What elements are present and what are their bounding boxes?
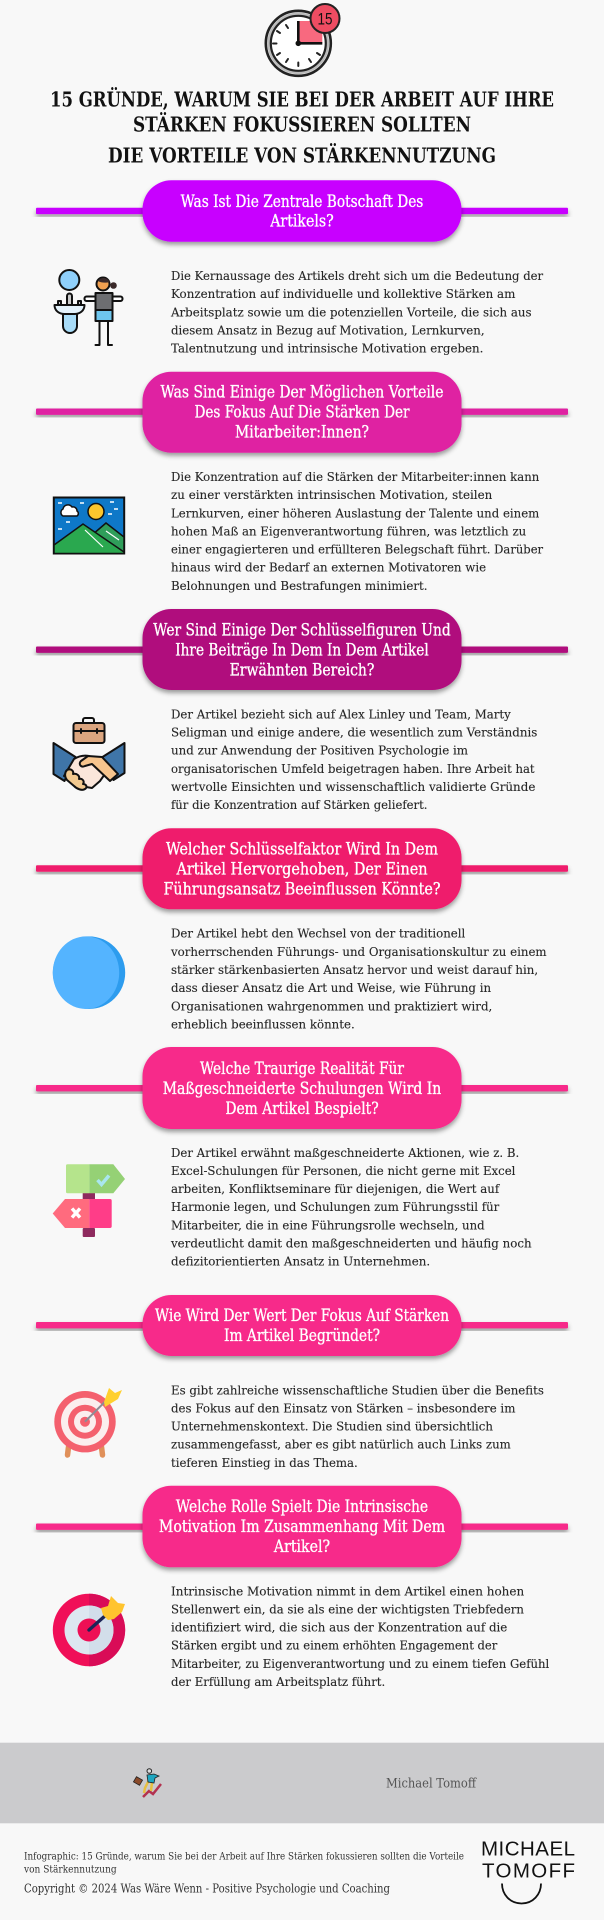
text: Aktionen: Mitarbeiter, die in eine Führungsrolle wechseln, und	[171, 1218, 485, 1232]
text: Konzentration auf Stärken: Belohnungen und Bestrafungen minimiert.	[171, 579, 428, 593]
icon: handshake and briefcase	[54, 718, 124, 790]
icon: sink and person	[54, 270, 122, 345]
heading: Schulungen	[36, 1047, 568, 1129]
panel: section 3	[36, 609, 568, 812]
text: Konzentration auf Stärken: Lernkurven, einer höheren Auslastung der Talente und einem	[171, 506, 540, 520]
text: Kernaussage: Die Kernaussage des Artikels dreht sich um die Bedeutung der	[171, 269, 543, 283]
panel: author band	[0, 1743, 604, 1823]
panel: section 7	[36, 1486, 568, 1689]
panel: section 2	[36, 372, 568, 593]
text: intrinsische Motivation: Stellenwert ein, da sie als eine der wichtigsten Triebfedern	[171, 1602, 524, 1616]
heading: Schlüsselfaktor: Artikel Hervorgehoben, Der Einen	[176, 860, 428, 878]
logo: Michael Tomoff: MICHAEL	[481, 1838, 575, 1860]
text: Aktionen: verdeutlicht damit den maßgeschneiderten und häufig noch	[170, 1236, 532, 1250]
text: Konzentration auf Stärken	[171, 470, 543, 593]
title: STÄRKEN FOKUSSIEREN SOLLTEN	[133, 112, 471, 136]
text: Studien: Es gibt zahlreiche wissenschaftliche Studien über die Benefits	[171, 1383, 544, 1397]
heading: Vorteile: Des Fokus Auf Die Stärken Der	[194, 402, 410, 422]
text: Aktionen: Harmonie legen, und Schulungen zum Führungsstil für	[171, 1200, 499, 1214]
text: Kernaussage: Arbeitsplatz sowie um die potenziellen Vorteile, die sich aus	[170, 305, 532, 319]
text: Studien	[171, 1383, 544, 1470]
text: Führungskultur: dass dieser Ansatz die Art und Weise, wie Führung in	[171, 981, 491, 995]
icon: blue circle	[53, 936, 125, 1009]
panel: section 4	[36, 828, 568, 1031]
text: Studien: tieferen Einstieg in das Thema.	[171, 1456, 358, 1470]
text: Kernaussage: Talentnutzung und intrinsische Motivation ergeben.	[171, 341, 483, 355]
footer credit	[23, 1850, 464, 1896]
text: Studien: des Fokus auf den Einsatz von Stärken – insbesondere im	[171, 1401, 516, 1415]
text: Schlüsselfiguren: Seligman und einige andere, die wesentlich zum Verständnis	[171, 726, 537, 740]
heading: Schlüsselfiguren: Erwähnten Bereich?	[230, 660, 375, 680]
heading: intrinsische Motivation: Artikel?	[273, 1537, 330, 1556]
heading: Schulungen: Maßgeschneiderte Schulungen Wird In	[163, 1079, 442, 1098]
icon: climbing businessman	[133, 1769, 161, 1797]
text: Schlüsselfiguren: und zur Anwendung der Positiven Psychologie im	[171, 744, 469, 758]
text: Schlüsselfiguren: Der Artikel bezieht sich auf Alex Linley und Team, Marty	[171, 707, 511, 721]
author name: Michael Tomoff	[386, 1776, 478, 1792]
icon: target with dart	[53, 1594, 125, 1666]
text: Führungskultur: Organisationen wahrgenommen und praktiziert wird,	[171, 999, 492, 1013]
text: intrinsische Motivation: Mitarbeiter, zu Eigenverantwortung und zu einem tiefen Gefühl	[171, 1657, 549, 1671]
footer credit: von Stärkennutzung	[23, 1864, 117, 1876]
heading: Schlüsselfiguren: Wer Sind Einige Der Schlüsselfiguren Und	[153, 620, 451, 640]
text: Aktionen	[170, 1146, 532, 1269]
text: Führungskultur: vorherrschenden Führungs- und Organisationskultur zu einem	[170, 945, 547, 959]
heading: Wert des Fokus: Im Artikel Begründet?	[224, 1326, 380, 1345]
panel: section 5	[36, 1047, 568, 1269]
text: Studien: zusammengefasst, aber es gibt natürlich auch Links zum	[171, 1438, 511, 1452]
heading: Vorteile	[36, 372, 568, 453]
text: Kernaussage	[170, 269, 543, 355]
heading: Schulungen: Welche Traurige Realität Für	[200, 1059, 404, 1078]
heading: Schlüsselfaktor	[36, 828, 568, 909]
heading: Wert des Fokus	[36, 1295, 568, 1356]
heading: zentrale Botschaft: Was Ist Die Zentrale Botschaft Des	[181, 192, 423, 211]
text: intrinsische Motivation: identifiziert wird, die sich aus der Konzentration auf die	[171, 1621, 507, 1635]
footer credit: Copyright © 2024 Was Wäre Wenn - Positive Psychologie und Coaching	[24, 1882, 390, 1896]
heading: Schlüsselfaktor: Führungsansatz Beeinflussen Könnte?	[164, 880, 441, 898]
logo: Michael Tomoff	[481, 1838, 575, 1904]
text: Führungskultur: stärker stärkenbasierten Ansatz hervor und weist darauf hin,	[171, 963, 538, 977]
text: intrinsische Motivation: Intrinsische Motivation nimmt in dem Artikel einen hohen	[171, 1584, 524, 1598]
text: Schlüsselfiguren: für die Konzentration auf Stärken geliefert.	[171, 798, 428, 812]
text: Führungskultur: erheblich beeinflussen könnte.	[171, 1017, 355, 1031]
heading: Vorteile: Was Sind Einige Der Möglichen Vorteile	[160, 382, 444, 402]
icon: clock with 15 badge	[266, 4, 340, 76]
text: Führungskultur: Der Artikel hebt den Wechsel von der traditionell	[171, 927, 465, 941]
logo: Michael Tomoff: TOMOFF	[482, 1860, 575, 1882]
text: intrinsische Motivation: Stärken ergibt und zu einem erhöhten Engagement der	[171, 1639, 498, 1653]
text: Aktionen: Der Artikel erwähnt maßgeschneiderte Aktionen, wie z. B.	[171, 1146, 519, 1160]
text: intrinsische Motivation: der Erfüllung am Arbeitsplatz führt.	[171, 1675, 385, 1689]
title	[50, 86, 554, 168]
heading: intrinsische Motivation	[36, 1486, 568, 1567]
panel: section 6	[36, 1295, 568, 1470]
text: Konzentration auf Stärken: Die Konzentration auf die Stärken der Mitarbeiter:innen kann	[171, 470, 540, 484]
text: Konzentration auf Stärken: hohen Maß an Eigenverantwortung führen, was letztlich zu	[171, 524, 526, 538]
icon: signpost	[53, 1164, 125, 1237]
heading: Vorteile: Mitarbeiter:Innen?	[235, 422, 369, 442]
text: Schlüsselfiguren: organisatorischen Umfeld beigetragen haben. Ihre Arbeit hat	[171, 762, 535, 776]
heading: Schlüsselfaktor: Welcher Schlüsselfaktor Wird In Dem	[166, 840, 438, 858]
text: Führungskultur	[170, 927, 547, 1031]
text: Aktionen: Excel-Schulungen für Personen, die nicht gerne mit Excel	[171, 1164, 516, 1178]
text: Konzentration auf Stärken: zu einer verstärkten intrinsischen Motivation, steilen	[171, 488, 493, 502]
text: Studien: Unternehmenskontext. Die Studien sind übersichtlich	[171, 1420, 493, 1434]
heading: Schlüsselfiguren: Ihre Beiträge In Dem In Dem Artikel	[175, 640, 429, 660]
heading: Schulungen: Dem Artikel Bespielt?	[225, 1099, 379, 1118]
heading: intrinsische Motivation: Motivation Im Zusammenhang Mit Dem	[159, 1517, 445, 1536]
text: Schlüsselfiguren	[171, 707, 537, 812]
footer credit: Infographic: 15 Gründe, warum Sie bei der Arbeit auf Ihre Stärken fokussieren sollten die Vorteile	[24, 1850, 464, 1862]
panel: section 1	[36, 180, 568, 355]
title: DIE VORTEILE VON STÄRKENNUTZUNG	[108, 144, 496, 168]
heading: intrinsische Motivation: Welche Rolle Spielt Die Intrinsische	[176, 1497, 428, 1516]
heading: zentrale Botschaft: Artikels?	[269, 212, 334, 230]
icon: target on stand	[54, 1388, 122, 1455]
text: Kernaussage: Konzentration auf individuelle und kollektive Stärken am	[171, 287, 516, 301]
text: Schlüsselfiguren: wertvolle Einsichten und wissenschaftlich validierte Gründe	[171, 780, 535, 794]
text: Aktionen: arbeiten, Konfliktseminare für diejenigen, die Wert auf	[171, 1182, 501, 1196]
heading: Schlüsselfiguren	[36, 609, 568, 690]
icon: clock with 15 badge: 15	[318, 10, 332, 28]
text: Kernaussage: diesem Ansatz in Bezug auf Motivation, Lernkurven,	[171, 323, 485, 337]
text: Konzentration auf Stärken: einer engagierteren und erfüllteren Belegschaft führt. Darüber	[171, 543, 543, 557]
heading: Wert des Fokus: Wie Wird Der Wert Der Fokus Auf Stärken	[155, 1306, 449, 1325]
text: Aktionen: defizitorientierten Ansatz in Unternehmen.	[171, 1255, 430, 1269]
heading: zentrale Botschaft	[36, 180, 568, 242]
text: intrinsische Motivation	[171, 1584, 549, 1689]
text: Konzentration auf Stärken: hinaus wird der Bedarf an externen Motivatoren wie	[171, 561, 486, 575]
icon: landscape picture	[54, 498, 124, 554]
